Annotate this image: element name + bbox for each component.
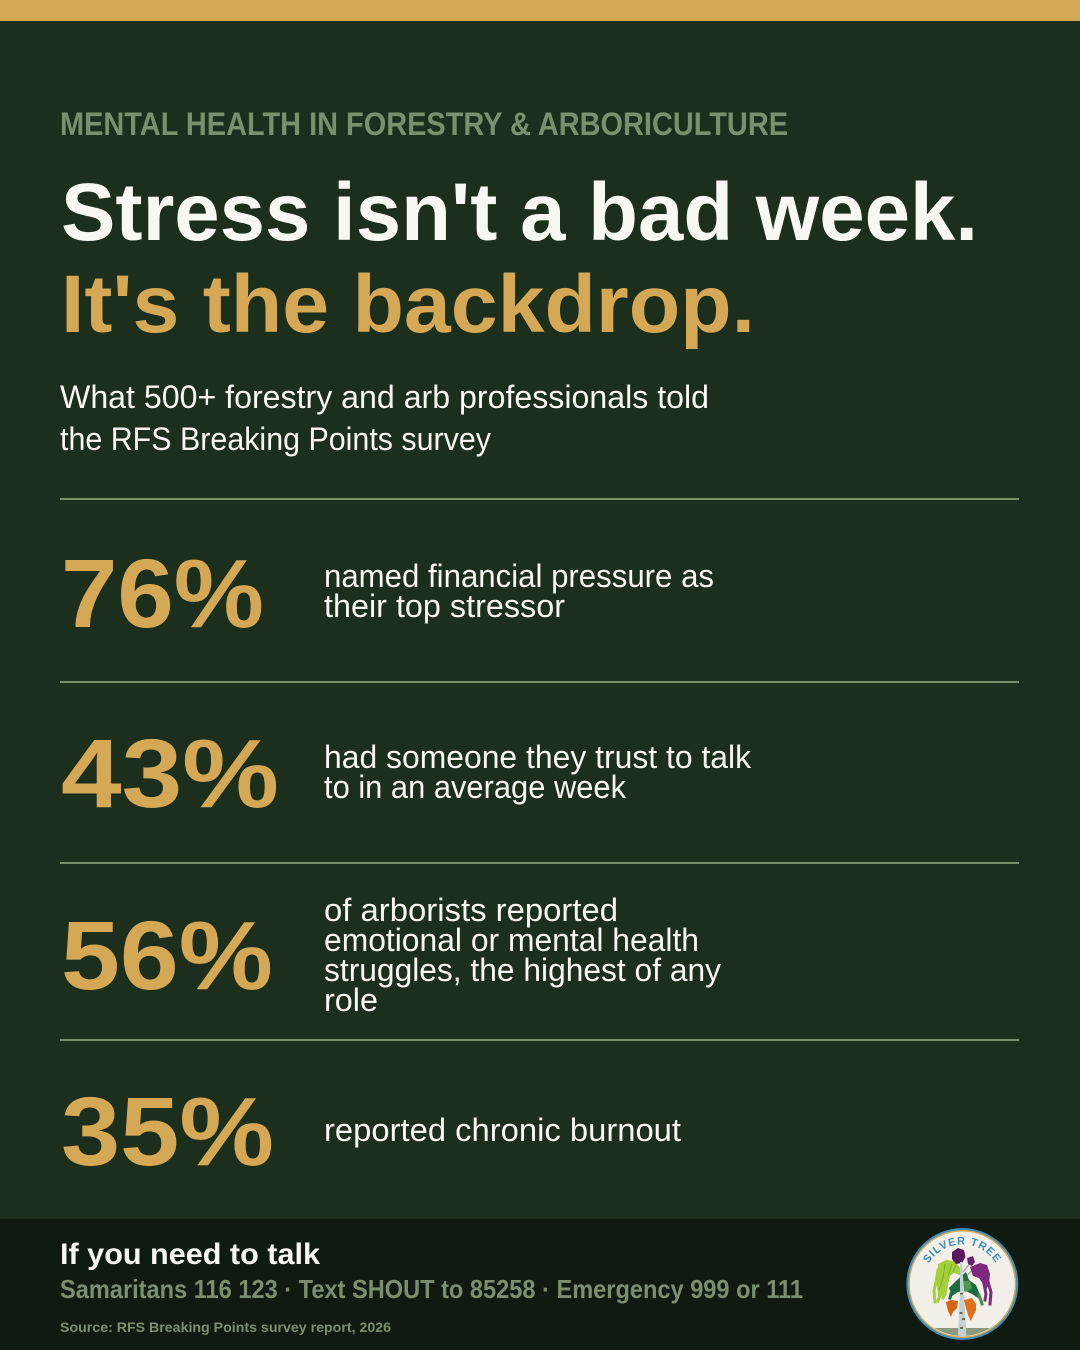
foliage: small purple — [967, 1256, 975, 1266]
stat row: 56% arborists struggles: role — [324, 982, 378, 1018]
stat row: 56% arborists struggles: 56% — [61, 901, 273, 1010]
source: Source: RFS Breaking Points survey report, 2026 — [60, 1319, 391, 1335]
stat row: 76% financial pressure: their top stressor — [324, 588, 565, 624]
footer panel — [0, 1219, 1080, 1350]
stat row: 35% chronic burnout: reported chronic burnout — [324, 1112, 681, 1148]
stat row: 43% someone to talk to — [61, 719, 752, 828]
stat row: 76% financial pressure: named financial pressure as — [324, 558, 714, 594]
footer heading: If you need to talk — [60, 1238, 320, 1271]
title: Stress isn't a bad week. — [61, 167, 978, 258]
branches — [954, 1262, 975, 1278]
subtitle: What 500+ forestry and arb professionals told — [60, 379, 709, 415]
stat row: 76% financial pressure: 76% — [61, 539, 264, 648]
title: It's the backdrop. — [61, 259, 755, 350]
foliage: left orange — [946, 1300, 958, 1317]
eyebrow heading: MENTAL HEALTH IN FORESTRY & ARBORICULTURE — [60, 106, 788, 142]
stat row: 56% arborists struggles: of arborists reported — [324, 892, 618, 928]
stat row: 35% chronic burnout: 35% — [61, 1077, 274, 1186]
stat row: 43% someone to talk to: to in an average week — [324, 769, 627, 805]
subtitle: the RFS Breaking Points survey — [60, 421, 491, 457]
stat row: 35% chronic burnout — [61, 1077, 681, 1186]
foliage: lime — [934, 1260, 960, 1302]
stat row: 56% arborists struggles: emotional or mental health — [324, 922, 699, 958]
stat row: 56% arborists struggles: struggles, the highest of any — [324, 952, 721, 988]
foliage: right orange — [964, 1298, 976, 1321]
tree trunk — [958, 1262, 966, 1336]
title — [61, 167, 978, 350]
top accent bar — [0, 0, 1080, 21]
foliage: right purple — [970, 1263, 991, 1304]
logo text: SILVER TREE — [923, 1237, 1002, 1262]
stat row: 43% someone to talk to: 43% — [61, 719, 279, 828]
stat row: 56% arborists struggles — [61, 892, 721, 1018]
stat row: 43% someone to talk to: had someone they trust to talk — [324, 739, 752, 775]
helplines: Samaritans 116 123 · Text SHOUT to 85258 · Emergency 999 or 111 — [60, 1274, 803, 1304]
foliage: green canopy — [949, 1272, 982, 1304]
stat row: 76% financial pressure — [61, 539, 714, 648]
foliage: dark purple top — [952, 1248, 966, 1264]
subtitle — [60, 379, 709, 457]
icon: Silver Tree logo badge — [906, 1228, 1018, 1340]
